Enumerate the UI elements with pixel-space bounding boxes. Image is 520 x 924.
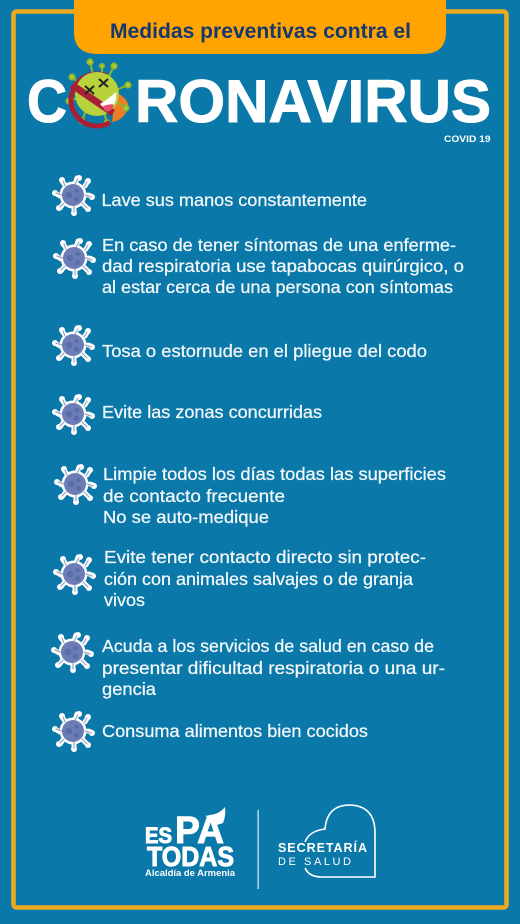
- icon: virus: [52, 325, 95, 366]
- item 8: [52, 711, 368, 752]
- icon: virus with prohibition sign: [61, 59, 133, 136]
- icon: virus: [52, 711, 95, 752]
- text: No se auto-medique: [103, 507, 269, 527]
- text: Lave sus manos constantemente: [102, 190, 367, 210]
- text: [102, 636, 445, 699]
- item 3: [52, 325, 427, 366]
- text: al estar cerca de una persona con síntomas: [102, 277, 453, 297]
- text: [102, 235, 464, 297]
- text: ción con animales salvajes o de granja: [104, 569, 413, 589]
- icon: virus: [53, 238, 96, 279]
- text: Acuda a los servicios de salud en caso de: [102, 636, 434, 656]
- title: coronavirus: RONAVIRUS: [135, 68, 491, 135]
- item 6: [53, 547, 426, 610]
- logo: Es Pa Todas: ES: [145, 823, 172, 848]
- item 2: [53, 235, 464, 297]
- text: vivos: [104, 590, 145, 610]
- text: gencia: [102, 679, 156, 699]
- logo: Es Pa Todas: [145, 807, 235, 878]
- text: Evite tener contacto directo sin protec-: [104, 547, 426, 567]
- icon: virus: [52, 394, 95, 435]
- text: de contacto frecuente: [103, 486, 285, 506]
- item 4: [52, 394, 322, 435]
- item 1: [52, 175, 367, 216]
- text: Evite las zonas concurridas: [102, 402, 322, 422]
- icon: virus: [51, 632, 94, 673]
- item 5: [54, 464, 446, 527]
- title: coronavirus: C: [27, 68, 67, 135]
- text: presentar dificultad respiratoria o una ur-: [102, 658, 445, 678]
- text: Limpie todos los días todas las superficies: [103, 464, 446, 484]
- text: [103, 464, 446, 527]
- logo: Es Pa Todas: Alcaldía de Armenia: [145, 868, 235, 878]
- logo: Secretaría de Salud: [278, 805, 375, 877]
- logo: Secretaría de Salud: DE SALUD: [278, 856, 351, 868]
- heading: medidas preventivas: Medidas preventivas contra el: [110, 19, 411, 43]
- text: Consuma alimentos bien cocidos: [102, 721, 368, 741]
- logo: Es Pa Todas: PA: [175, 810, 224, 852]
- item 7: [51, 632, 445, 699]
- text: dad respiratoria use tapabocas quirúrgico, o: [102, 256, 464, 276]
- icon: virus: [52, 175, 95, 216]
- icon: virus: [53, 554, 96, 595]
- divider: [258, 810, 259, 889]
- header tab: [74, 0, 446, 54]
- logo: Secretaría de Salud: SECRETARÍA: [278, 840, 367, 855]
- text: [104, 547, 426, 610]
- logo: Es Pa Todas: TODAS: [147, 841, 234, 872]
- text: Tosa o estornude en el pliegue del codo: [102, 341, 427, 361]
- label: covid 19: COVID 19: [444, 134, 490, 145]
- icon: virus: [54, 464, 97, 505]
- text: En caso de tener síntomas de una enferme-: [102, 235, 456, 255]
